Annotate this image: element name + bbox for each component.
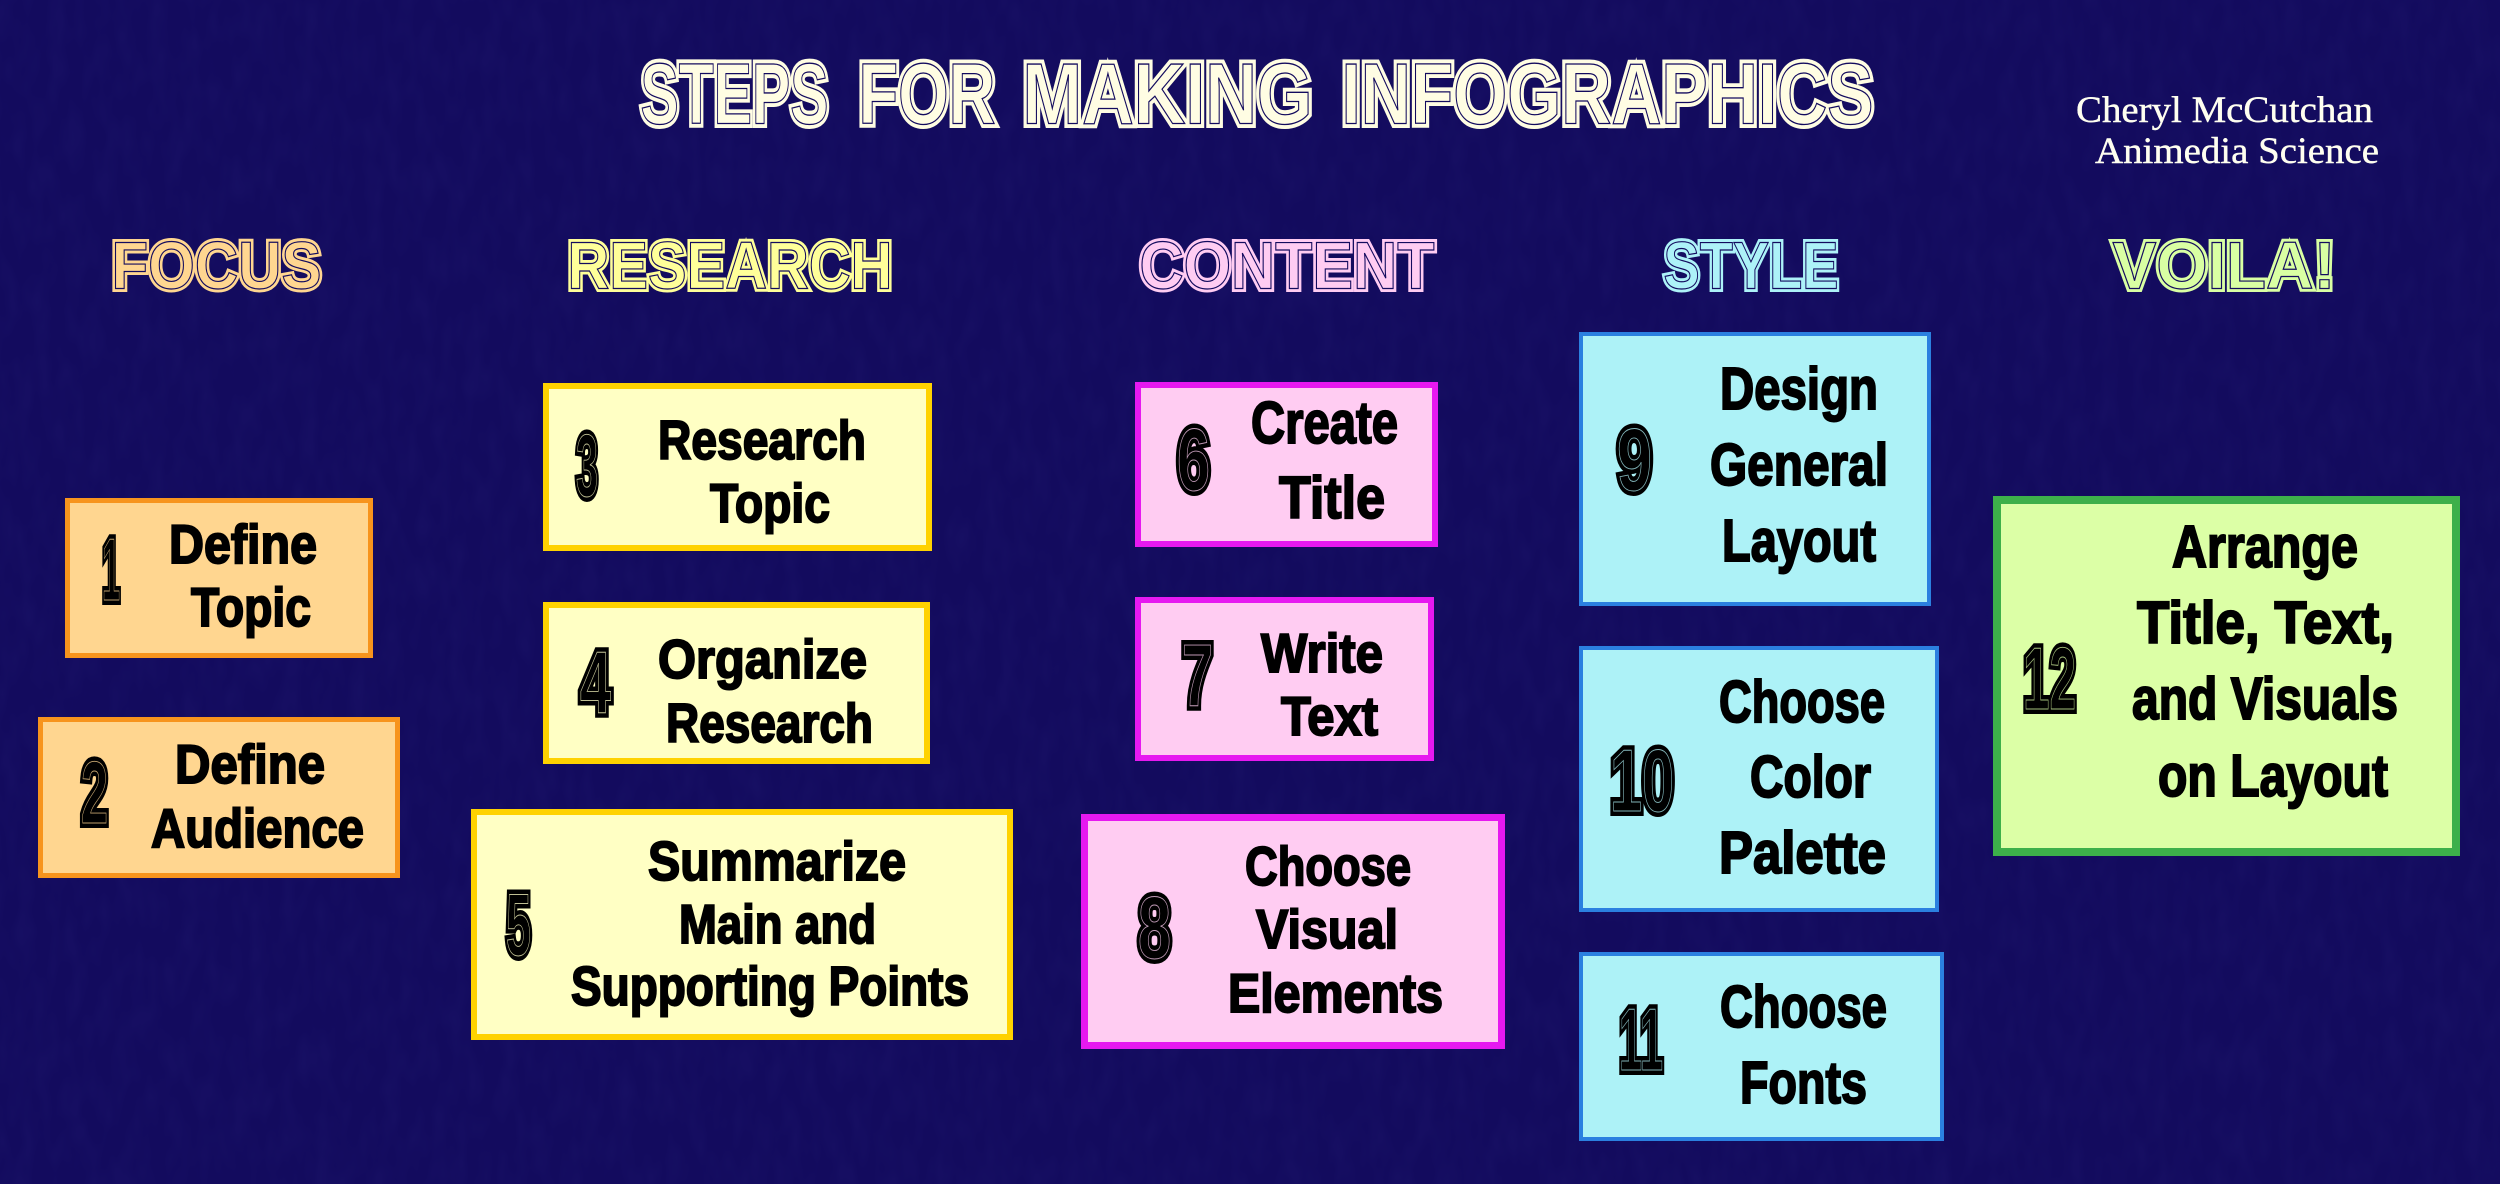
number 2: 2 — [81, 743, 108, 842]
label: on Layout — [2158, 743, 2388, 809]
label — [1251, 390, 1398, 531]
panel: step 1 — [68, 500, 370, 656]
number 8 — [1138, 878, 1171, 977]
label — [1710, 356, 1888, 574]
title: MAKING — [1022, 46, 1312, 142]
label: Research — [658, 409, 866, 471]
title: INFOGRAPHICS — [1342, 46, 1874, 142]
label: Visual — [1256, 898, 1398, 960]
number 10: 10 — [1610, 731, 1674, 830]
title: INFOGRAPHICS — [1342, 46, 1874, 142]
number 12: 12 — [2023, 629, 2076, 728]
number 4: 4 — [580, 633, 611, 732]
title: FOR — [858, 46, 996, 142]
panel: step 9 — [1581, 334, 1929, 604]
label: Elements — [1228, 962, 1443, 1024]
panel: step 6 — [1138, 385, 1435, 544]
label: Define — [175, 733, 325, 795]
panel: step 3 — [546, 386, 929, 548]
label: Title — [1279, 465, 1385, 531]
number 2: 2 — [81, 743, 108, 842]
number 8: 8 — [1138, 878, 1171, 977]
panel: step 5 — [474, 812, 1010, 1037]
heading: voila: VOILA! — [2112, 228, 2336, 304]
heading: focus: FOCUS — [112, 228, 322, 304]
heading: content: CONTENT — [1140, 228, 1435, 304]
number 1 — [102, 520, 120, 619]
label: Color — [1750, 744, 1871, 810]
label: Audience — [151, 797, 364, 859]
number 10: 10 — [1610, 731, 1674, 830]
label — [1720, 974, 1887, 1116]
author credit: Animedia Science — [2095, 131, 2379, 172]
label: Arrange — [2172, 514, 2358, 580]
label: and Visuals — [2132, 666, 2398, 732]
title: STEPS — [640, 46, 828, 142]
label: Title, Text, — [2137, 590, 2394, 656]
number 12: 12 — [2023, 629, 2076, 728]
label: Organize — [658, 628, 867, 690]
label: Topic — [710, 472, 830, 534]
title: FOR — [858, 46, 996, 142]
number 9: 9 — [1617, 410, 1652, 509]
label — [1228, 835, 1443, 1024]
panel: step 2 — [40, 720, 398, 876]
heading: style: STYLE — [1664, 228, 1838, 304]
label: Topic — [191, 576, 311, 638]
heading: voila: VOILA! — [2112, 228, 2336, 304]
author credit: Cheryl McCutchan — [2076, 90, 2373, 131]
panel: step 7 — [1138, 600, 1431, 758]
label: Layout — [1722, 508, 1876, 574]
label: Main and — [679, 893, 876, 955]
number 11 — [1619, 990, 1663, 1089]
label: General — [1710, 432, 1888, 498]
label: Research — [666, 692, 873, 754]
label: Palette — [1719, 820, 1886, 886]
panel: step 1: 1 — [102, 520, 120, 619]
number 5 — [506, 875, 531, 974]
label — [151, 733, 364, 859]
label — [1719, 669, 1886, 886]
number 3 — [576, 416, 598, 515]
label: Choose — [1245, 835, 1411, 897]
number 4: 4 — [580, 633, 611, 732]
number 7: 7 — [1182, 626, 1213, 725]
panel: step 10 — [1581, 648, 1937, 910]
label — [658, 409, 866, 534]
number 10 — [1610, 731, 1674, 830]
title — [640, 46, 1874, 142]
panel: step 3: 3 — [576, 416, 598, 515]
number 5: 5 — [506, 875, 531, 974]
number 6: 6 — [1177, 410, 1210, 509]
panel: step 11: 11 — [1619, 990, 1663, 1089]
label: Summarize — [648, 830, 906, 892]
heading: focus: FOCUS — [112, 228, 322, 304]
number 6: 6 — [1177, 410, 1210, 509]
heading: research: RESEARCH — [568, 228, 892, 304]
title: MAKING — [1022, 46, 1312, 142]
panel: step 12 — [1997, 500, 2456, 852]
label — [571, 830, 969, 1017]
panel: step 11 — [1581, 954, 1942, 1139]
number 2 — [81, 743, 108, 842]
label: Text — [1281, 685, 1378, 747]
label — [2132, 514, 2398, 809]
label: Write — [1261, 622, 1383, 684]
number 8: 8 — [1138, 878, 1171, 977]
panel: step 1: 1 — [102, 520, 120, 619]
panel: step 11: 11 — [1619, 990, 1663, 1089]
label: Choose — [1719, 669, 1885, 735]
label: Choose — [1720, 974, 1887, 1040]
label: Design — [1720, 356, 1878, 422]
number 7: 7 — [1182, 626, 1213, 725]
number 6 — [1177, 410, 1210, 509]
label — [1261, 622, 1383, 747]
heading: style: STYLE — [1664, 228, 1838, 304]
number 4 — [580, 633, 611, 732]
number 5: 5 — [506, 875, 531, 974]
panel: step 3: 3 — [576, 416, 598, 515]
label — [658, 628, 873, 754]
heading: research: RESEARCH — [568, 228, 892, 304]
title: STEPS — [640, 46, 828, 142]
panel: step 4 — [546, 605, 927, 761]
number 7 — [1182, 626, 1213, 725]
label — [169, 513, 317, 638]
label: Fonts — [1740, 1050, 1867, 1116]
label: Create — [1251, 390, 1398, 456]
number 9: 9 — [1617, 410, 1652, 509]
panel: step 8 — [1084, 818, 1502, 1046]
label: Define — [169, 513, 317, 575]
label: Supporting Points — [571, 955, 969, 1017]
heading: content: CONTENT — [1140, 228, 1435, 304]
author credit — [2076, 90, 2379, 172]
number 12 — [2023, 629, 2076, 728]
